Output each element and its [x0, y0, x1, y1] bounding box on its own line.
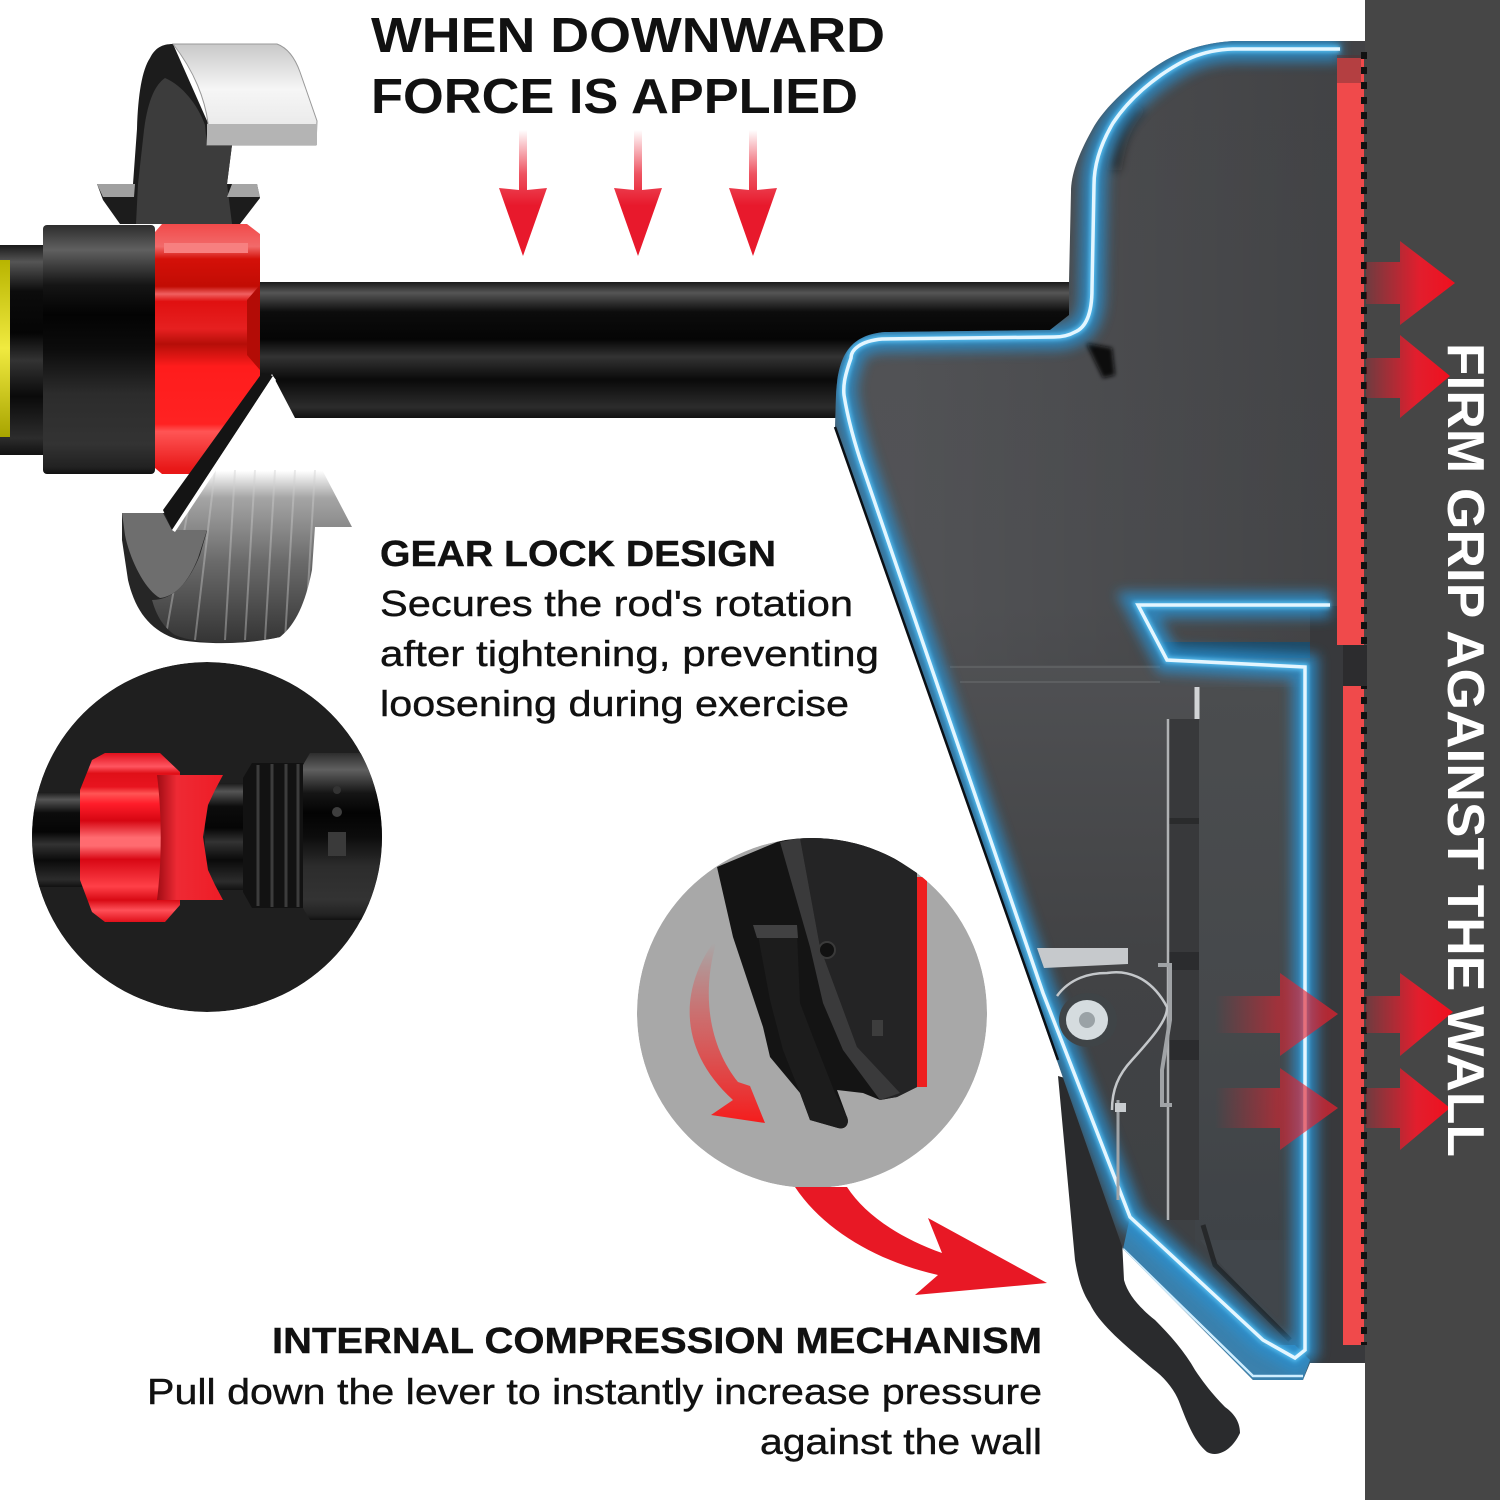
text block: gear lock design: GEAR LOCK DESIGN: [380, 533, 776, 574]
detail circle: lever: [637, 836, 987, 1188]
heading: downward force: [371, 9, 885, 124]
inner mechanism plate: [1168, 719, 1199, 1220]
downward force arrows: [499, 130, 777, 256]
dark inner shoulder shadows: [1114, 108, 1140, 170]
vertical wall label: FIRM GRIP AGAINST THE WALL: [1436, 343, 1494, 1157]
rod shaft: [255, 282, 1085, 418]
curved pull arrow: [795, 1187, 1047, 1295]
lever handle: [1058, 1076, 1240, 1454]
blue bottom band: [1123, 1217, 1310, 1380]
text block: gear lock design: [380, 533, 879, 724]
text block: gear lock design: Secures the rod's rotation: [380, 583, 853, 624]
window interior: [1310, 606, 1365, 1366]
text block: internal compression mechanism: [147, 1320, 1042, 1462]
pivot bolt and spring: [1037, 948, 1172, 1200]
heading: downward force: WHEN DOWNWARD: [371, 9, 885, 63]
gear lock rod: [30, 792, 86, 887]
gear lock black threaded body: [205, 753, 384, 920]
gear lock red cone: [157, 775, 223, 900]
left gear lock assembly: [0, 224, 260, 474]
bottom rotation arrow: [122, 373, 352, 643]
lever clamp closeup: [717, 836, 917, 1128]
blue glow outline: [844, 49, 1340, 1358]
force arrows against wall: [1215, 241, 1455, 1150]
red grip strip with teeth: [1337, 52, 1367, 1345]
detail circle: gear lock: [30, 662, 384, 1012]
text block: internal compression mechanism: Pull down the lever to instantly increase pressure: [147, 1371, 1042, 1412]
lever rotation arrow: [690, 943, 765, 1123]
text block: internal compression mechanism: INTERNAL COMPRESSION MECHANISM: [272, 1320, 1042, 1361]
clamp body: [830, 40, 1370, 1380]
gear lock red knob: [80, 753, 180, 922]
heading: downward force: FORCE IS APPLIED: [371, 70, 858, 124]
text block: gear lock design: loosening during exercise: [380, 683, 849, 724]
top rotation arrow: [97, 44, 317, 224]
wall panel: [1365, 0, 1500, 1500]
text block: gear lock design: after tightening, preventing: [380, 633, 879, 674]
text block: internal compression mechanism: against the wall: [760, 1421, 1042, 1462]
